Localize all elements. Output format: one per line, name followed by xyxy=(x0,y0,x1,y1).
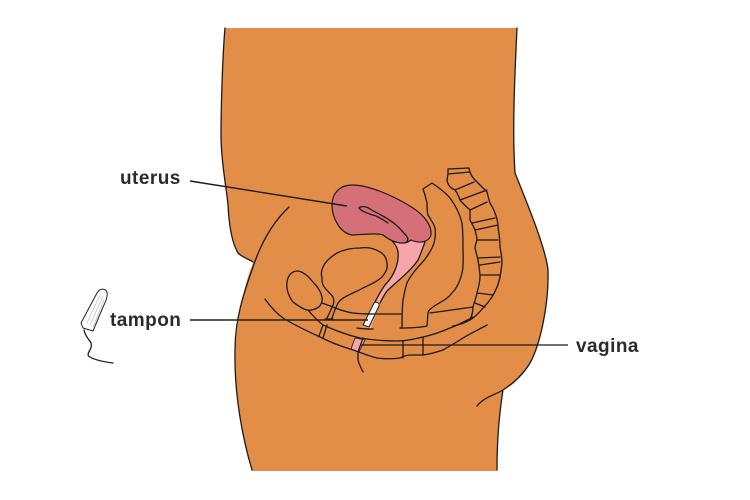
rectum wall xyxy=(400,183,463,328)
label: uterus xyxy=(120,168,347,206)
label: tampon: tampon xyxy=(110,310,181,331)
tampon icon xyxy=(81,289,113,363)
bladder xyxy=(321,248,387,319)
uterus xyxy=(332,185,431,243)
vagina xyxy=(362,235,425,329)
pubic bone xyxy=(287,271,322,310)
buttock crease xyxy=(477,390,503,406)
spine / sacrum xyxy=(447,168,480,320)
label: vagina: vagina xyxy=(576,336,639,357)
uterine cavity xyxy=(359,207,408,243)
pelvic floor lines xyxy=(322,303,473,314)
body silhouette xyxy=(221,28,548,471)
vaginal opening xyxy=(351,338,365,352)
tampon string xyxy=(84,330,113,363)
pelvic organs xyxy=(265,168,502,372)
tampon in place xyxy=(363,302,379,327)
label: uterus: uterus xyxy=(120,168,181,189)
